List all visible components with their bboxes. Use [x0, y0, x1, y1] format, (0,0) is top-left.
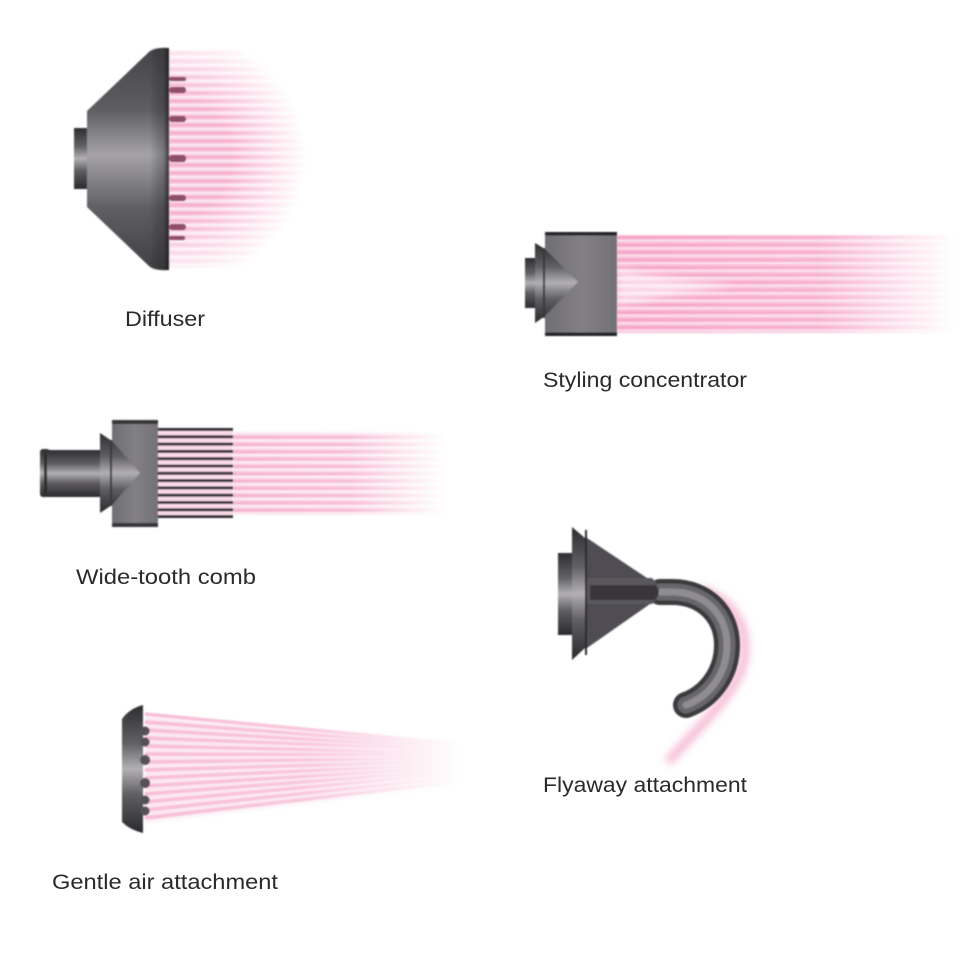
gentle air airflow [145, 714, 460, 822]
panel: styling concentrator [525, 232, 957, 392]
icon: flyaway nozzle [558, 527, 727, 705]
panel: diffuser [72, 46, 299, 326]
flyaway airflow [668, 590, 745, 762]
icon: diffuser nozzle [74, 48, 186, 270]
panel: wide-tooth comb [40, 420, 448, 589]
label: diffuser: Diffuser [125, 308, 205, 331]
label: wide-tooth comb: Wide-tooth comb [76, 566, 256, 589]
icon: gentle air nozzle [122, 705, 150, 833]
diffuser airflow [168, 50, 299, 268]
label: flyaway attachment: Flyaway attachment [543, 774, 747, 797]
comb airflow [233, 432, 448, 515]
concentrator airflow [617, 235, 957, 333]
icon: comb nozzle [40, 420, 233, 527]
icon: concentrator nozzle [525, 232, 617, 336]
panel: gentle air attachment [52, 705, 460, 894]
panel: flyaway attachment [543, 527, 747, 797]
label: gentle air attachment: Gentle air attachment [52, 871, 278, 894]
label: styling concentrator: Styling concentrator [543, 369, 747, 392]
